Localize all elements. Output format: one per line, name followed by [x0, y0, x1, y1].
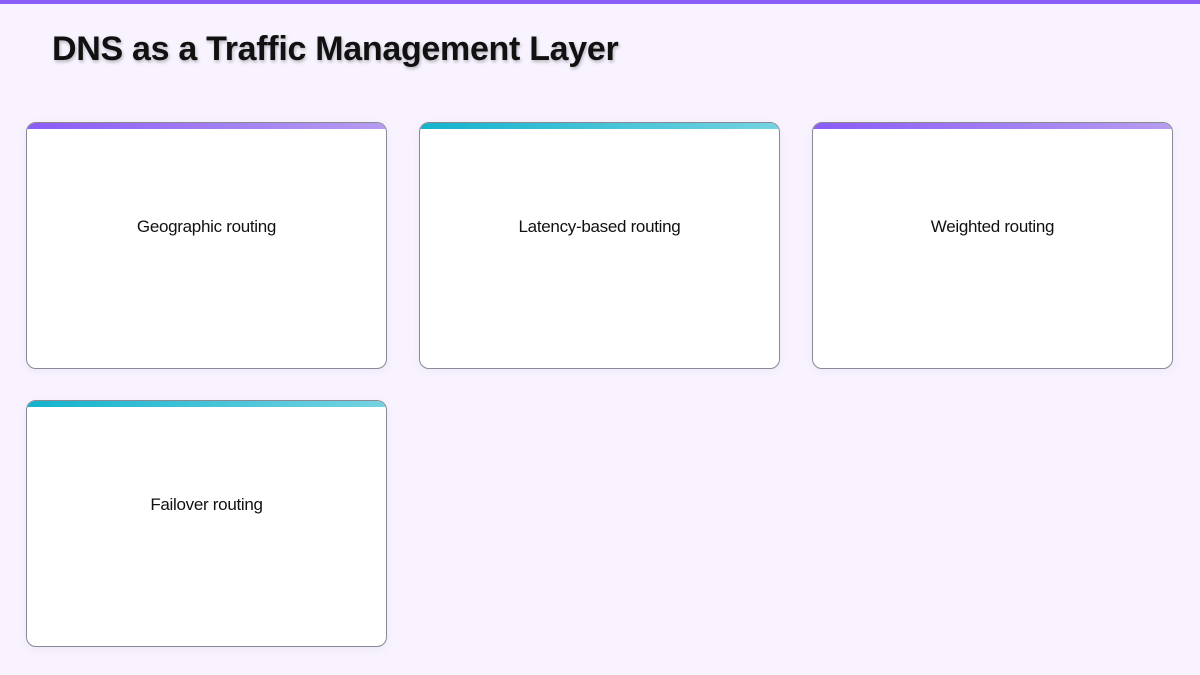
label: failover routing: Failover routing: [150, 495, 263, 514]
label: weighted routing: Weighted routing: [931, 217, 1054, 236]
label: latency-based routing: Latency-based routing: [519, 217, 680, 236]
panel: geographic routing: [26, 122, 387, 369]
title: DNS as a Traffic Management Layer: [52, 30, 618, 68]
label: geographic routing: Geographic routing: [137, 217, 276, 236]
panel: latency-based routing: [419, 122, 780, 369]
panel: failover routing: [26, 400, 387, 647]
panel: weighted routing: [812, 122, 1173, 369]
